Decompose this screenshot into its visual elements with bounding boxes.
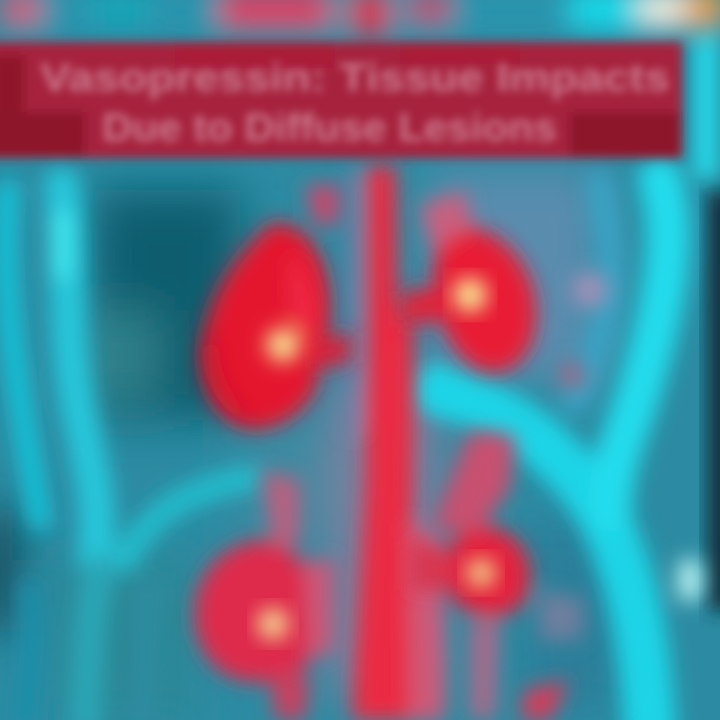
upper right vessel speckle — [558, 272, 608, 389]
central artery — [346, 165, 445, 720]
cyan vessels, left — [6, 185, 250, 720]
cyan vessels, right — [435, 35, 706, 720]
title banner — [0, 42, 682, 158]
title text: Due to Diffuse Lesions — [102, 106, 557, 150]
lower right kidney — [410, 430, 585, 720]
title text: Vasopressin: Tissue Impacts — [40, 56, 670, 100]
upper left kidney — [201, 185, 352, 429]
title text — [40, 56, 670, 150]
dark right edge — [708, 190, 720, 610]
lower left kidney — [194, 470, 335, 720]
upper right kidney — [400, 190, 537, 373]
top edge strip — [0, 0, 720, 36]
